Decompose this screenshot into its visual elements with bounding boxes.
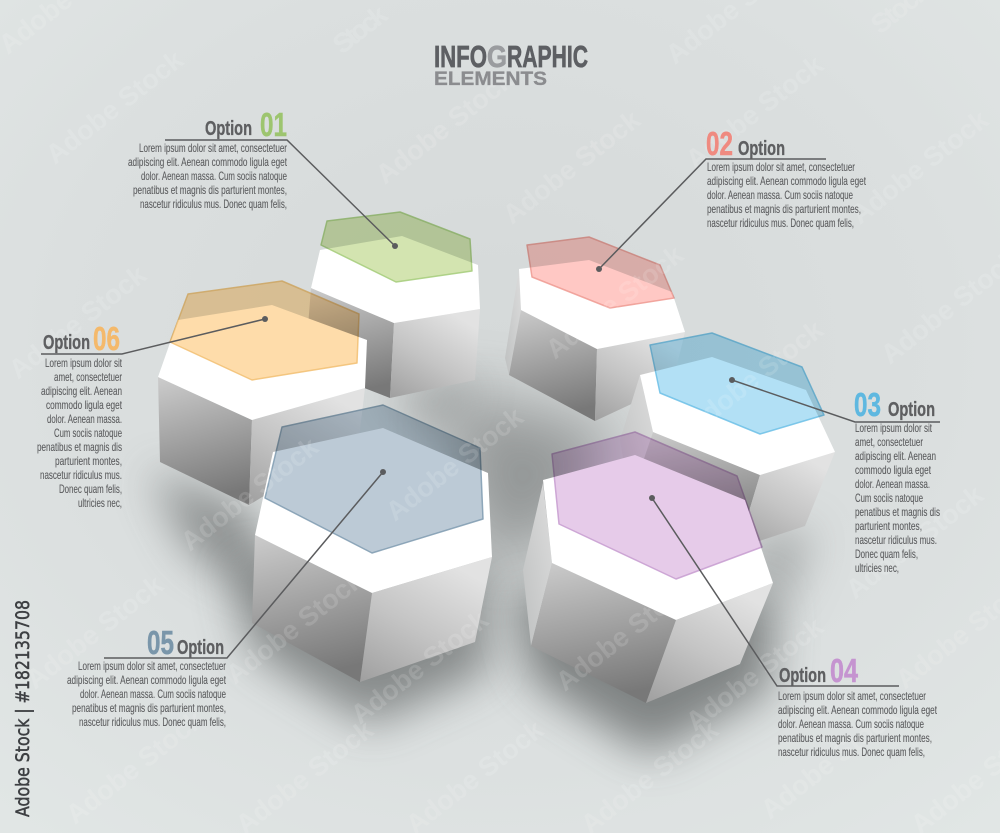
callout: option 04: Option xyxy=(779,665,826,687)
callout: option 02: dolor. Aenean massa. Cum sociis natoque xyxy=(707,188,853,202)
callout: option 01: adipiscing elit. Aenean commodo ligula eget xyxy=(128,155,287,169)
hexagon block 2 xyxy=(505,260,685,421)
watermark text: Adobe Stock xyxy=(380,401,530,527)
callout: option 05: 05 xyxy=(147,624,174,661)
watermark text: Adobe Stock xyxy=(370,64,520,190)
cast shadows xyxy=(150,380,815,755)
watermark text: Adobe Stock xyxy=(60,704,210,830)
callout: option 05: Lorem ipsum dolor sit amet, consectetuer xyxy=(78,659,226,673)
watermark text: Adobe Stock xyxy=(40,44,190,170)
translucent tile 1 green xyxy=(321,212,472,282)
title: ELEMENTS xyxy=(434,68,547,90)
watermark text: Adobe Stock xyxy=(680,611,830,737)
hexagon block 1 xyxy=(305,236,480,398)
callout: option 01: Option xyxy=(205,118,252,140)
hexagon block 6 xyxy=(158,305,367,505)
callout: option 06: 06 xyxy=(93,320,120,357)
translucent tile 4 purple xyxy=(552,432,762,579)
callout: option 02 xyxy=(596,125,866,272)
callout: option 03: dolor. Aenean massa. xyxy=(855,477,930,491)
callout: option 06: adipiscing elit. Aenean xyxy=(41,384,122,398)
watermark text: Adobe Stock xyxy=(175,431,325,557)
callout: option 06 xyxy=(37,316,268,510)
callout: option 01: Lorem ipsum dolor sit amet, consectetuer xyxy=(139,141,287,155)
callout: option 06: commodo ligula eget xyxy=(46,398,122,412)
watermark text: Adobe Stock xyxy=(345,604,495,730)
callout: option 06: ultricies nec, xyxy=(78,496,122,510)
callout: option 06: penatibus et magnis dis xyxy=(37,440,122,454)
callout: option 03 xyxy=(729,377,940,575)
watermark text: Stock xyxy=(327,0,394,60)
callout: option 04: penatibus et magnis dis parturient montes, xyxy=(778,731,932,745)
watermark text: Adobe Stock xyxy=(220,564,370,690)
callout: option 04: dolor. Aenean massa. Cum sociis natoque xyxy=(778,717,924,731)
callout: option 02: nascetur ridiculus mus. Donec quam felis, xyxy=(707,216,854,230)
callout: option 06: amet, consectetuer xyxy=(54,370,122,384)
callout: option 04: nascetur ridiculus mus. Donec quam felis, xyxy=(778,745,925,759)
watermark text: Adobe Stock xyxy=(755,699,905,825)
translucent tile 2 red xyxy=(527,237,674,308)
callout: option 05: Option xyxy=(177,637,224,659)
callout: option 04: Lorem ipsum dolor sit amet, consectetuer xyxy=(778,689,926,703)
watermark text: Adobe Stock xyxy=(3,259,153,385)
callout: option 03: Cum sociis natoque xyxy=(855,491,923,505)
stock id stamp: Adobe Stock | #182135708 xyxy=(12,600,34,817)
callout: option 06: Donec quam felis, xyxy=(59,482,122,496)
callout: option 06: nascetur ridiculus mus. xyxy=(40,468,122,482)
callout: option 03: penatibus et magnis dis xyxy=(855,505,940,519)
callout: option 03: ultricies nec, xyxy=(855,561,899,575)
callout: option 01: penatibus et magnis dis parturient montes, xyxy=(133,183,287,197)
callout: option 06: parturient montes, xyxy=(55,454,122,468)
title: G xyxy=(487,39,507,74)
callout: option 01: dolor. Aenean massa. Cum sociis natoque xyxy=(141,169,287,183)
callout: option 05: nascetur ridiculus mus. Donec quam felis, xyxy=(79,715,226,729)
watermark text: Adobe Stock xyxy=(845,104,995,230)
callout: option 01: nascetur ridiculus mus. Donec quam felis, xyxy=(140,197,287,211)
callout: option 06: Lorem ipsum dolor sit xyxy=(45,356,122,370)
hexagon block 5 xyxy=(252,428,492,682)
callout: option 06: Cum sociis natoque xyxy=(54,426,122,440)
callout: option 05: adipiscing elit. Aenean commodo ligula eget xyxy=(67,673,226,687)
watermark text: Adobe Stock xyxy=(680,49,830,175)
translucent tile 3 blue xyxy=(650,333,824,434)
callout: option 02: 02 xyxy=(706,125,733,162)
callout: option 04 xyxy=(649,495,937,759)
hexagon block 4 xyxy=(523,455,773,703)
callout: option 02: adipiscing elit. Aenean commodo ligula eget xyxy=(707,174,866,188)
title: INFO xyxy=(434,39,487,74)
watermark text: Adobe Stock xyxy=(840,479,990,605)
hexagon block 3 xyxy=(620,357,835,548)
callout: option 06: dolor. Aenean massa. xyxy=(47,412,122,426)
callout: option 03: adipiscing elit. Aenean xyxy=(855,449,936,463)
callout: option 03: Option xyxy=(888,399,935,421)
watermark text: Adobe Stock xyxy=(497,104,647,230)
callout: option 05 xyxy=(67,469,386,729)
title xyxy=(434,39,588,90)
callout: option 02: Option xyxy=(738,138,785,160)
translucent tile 6 orange xyxy=(170,281,359,380)
watermark text: Adobe Stock xyxy=(680,314,830,440)
title: RAPHIC xyxy=(507,39,588,74)
callout: option 02: penatibus et magnis dis parturient montes, xyxy=(707,202,861,216)
callout: option 06: Option xyxy=(43,332,90,354)
callout: option 03: Donec quam felis, xyxy=(855,547,918,561)
callout: option 03: parturient montes, xyxy=(855,519,922,533)
callout: option 04: 04 xyxy=(830,652,858,689)
watermark text: Adobe Stock xyxy=(540,239,690,365)
callout: option 02: Lorem ipsum dolor sit amet, consectetuer xyxy=(707,160,855,174)
callout: option 03: nascetur ridiculus mus. xyxy=(855,533,937,547)
callout: option 03: Lorem ipsum dolor sit xyxy=(855,421,932,435)
callout: option 03: amet, consectetuer xyxy=(855,435,923,449)
translucent tile 5 slate xyxy=(265,405,483,553)
callout: option 05: penatibus et magnis dis parturient montes, xyxy=(72,701,226,715)
callout: option 03: 03 xyxy=(854,386,881,423)
callout: option 01: 01 xyxy=(260,106,287,143)
callout: option 01 xyxy=(128,106,398,249)
callout: option 05: dolor. Aenean massa. Cum sociis natoque xyxy=(80,687,226,701)
callout: option 03: commodo ligula eget xyxy=(855,463,931,477)
watermark text: Adobe Stock xyxy=(550,571,700,697)
watermark text: Adobe Stock xyxy=(20,569,170,695)
